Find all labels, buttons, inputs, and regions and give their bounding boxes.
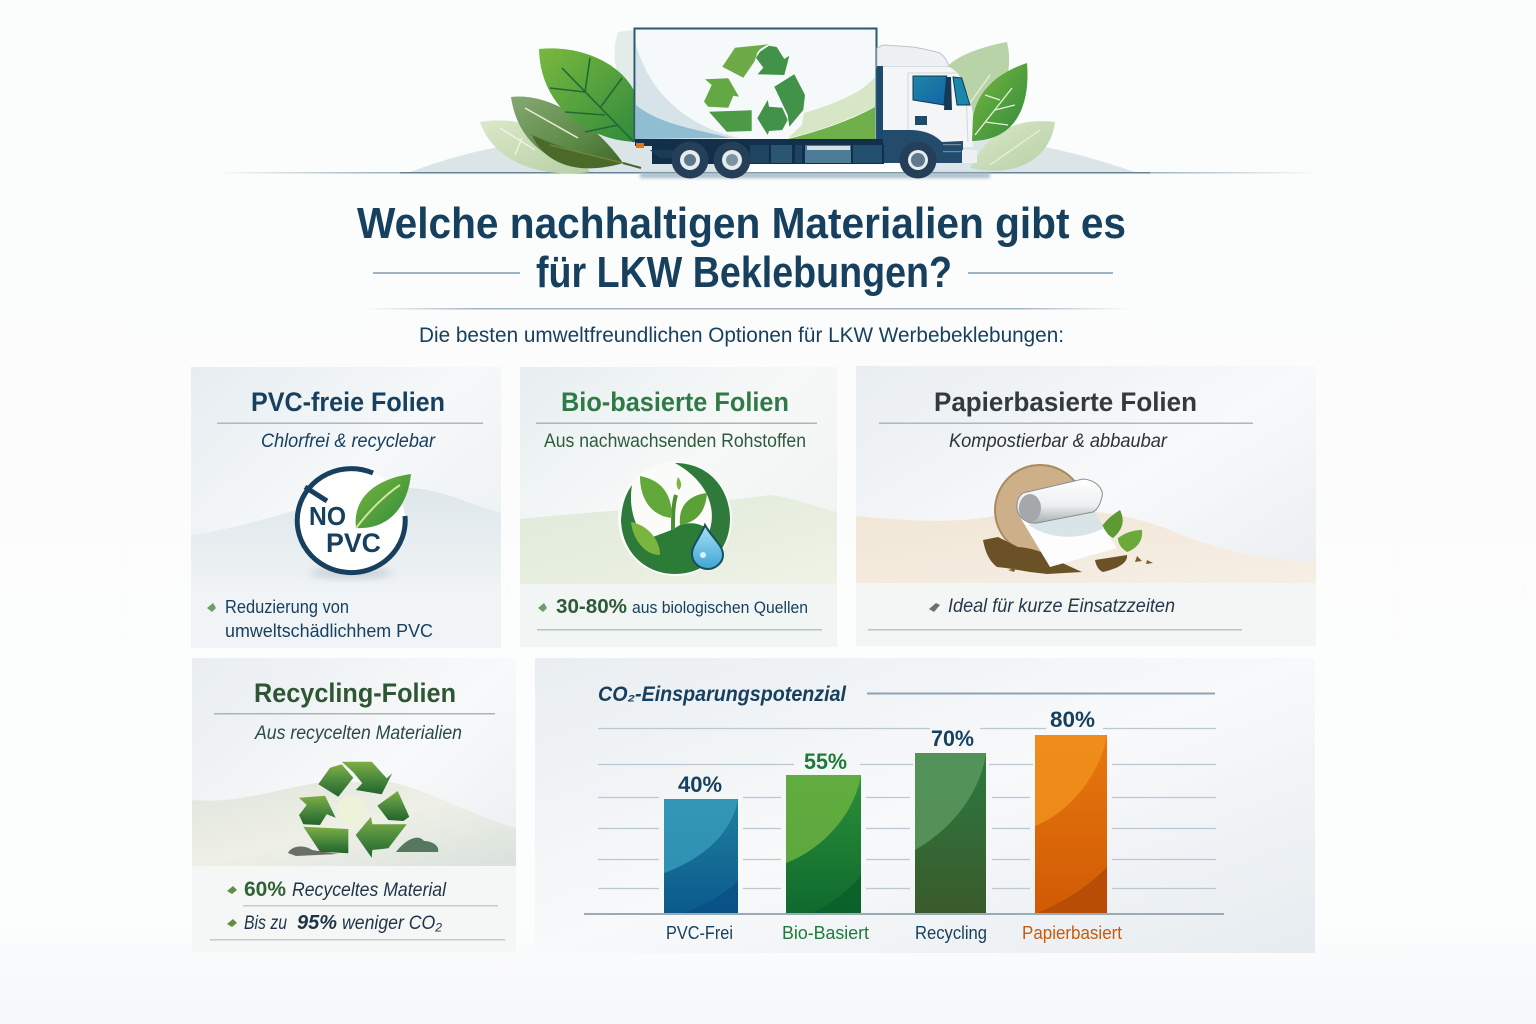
panel: PVC-freie Folien	[191, 367, 501, 648]
subheading: Chlorfrei & recyclebar	[261, 431, 436, 452]
bullet text: aus biologischen Quellen	[632, 598, 808, 617]
icon: no PVC badge: NO	[309, 501, 346, 531]
bullet text	[207, 597, 433, 641]
subheading: Aus nachwachsenden Rohstoffen	[544, 431, 806, 452]
axis labels: Bio-Basiert	[782, 923, 869, 943]
heading: Recycling-Folien	[254, 678, 456, 708]
bullet text: Reduzierung von	[225, 597, 349, 617]
bar: Bio-Basiert 55%	[786, 749, 861, 914]
heading: Papierbasierte Folien	[934, 387, 1197, 417]
axis labels: PVC-Frei	[666, 923, 733, 943]
bar: Papierbasiert 80%	[1035, 707, 1107, 914]
icon: right leaves	[948, 42, 1055, 171]
bar: Recycling 70%: 70%	[931, 726, 974, 751]
truck cargo box	[634, 28, 876, 140]
chart title: CO₂-Einsparungspotenzial	[598, 683, 847, 706]
subheading: Kompostierbar & abbaubar	[949, 431, 1168, 452]
icon: no PVC badge: PVC	[326, 528, 381, 558]
icon: recycling symbol on truck	[704, 44, 805, 135]
heading: PVC-freie Folien	[251, 387, 445, 417]
bullet: recycled material: Recyceltes Material	[292, 880, 447, 901]
bullet: CO2 reduction: Bis zu	[244, 913, 287, 934]
title: für LKW Beklebungen?	[536, 248, 952, 297]
subheading: Aus recycelten Materialien	[254, 723, 462, 744]
panel: Bio-basierte Folien	[520, 367, 837, 647]
truck	[634, 28, 977, 178]
bar: Recycling 70%	[915, 726, 986, 914]
icon: left leaves	[480, 30, 641, 173]
subtitle: Die besten umweltfreundlichen Optionen für LKW Werbebeklebungen:	[419, 324, 1064, 347]
axis labels: Papierbasiert	[1022, 923, 1122, 943]
bullet: CO2 reduction: weniger CO₂	[342, 913, 443, 934]
icon: plant with water drop	[618, 462, 732, 576]
icon: recycling symbol	[288, 762, 438, 858]
axis labels	[666, 923, 1122, 943]
bullet: CO2 reduction: 95%	[297, 912, 337, 934]
truck chassis	[635, 139, 884, 164]
panel: Recycling-Folien	[192, 658, 516, 952]
panel: Papierbasierte Folien	[856, 366, 1316, 646]
bar: Papierbasiert 80%: 80%	[1050, 707, 1095, 732]
bar: PVC-Frei 40%	[664, 772, 738, 914]
bullet: recycled material	[227, 878, 447, 901]
bullet: recycled material: 60%	[244, 878, 286, 901]
bullet text	[538, 596, 808, 618]
truck cab	[877, 45, 977, 163]
panel: CO2 savings chart	[535, 658, 1315, 953]
title	[357, 199, 1126, 297]
icon: compostable paper roll	[983, 465, 1153, 574]
hero illustration: truck with leaves	[215, 28, 1320, 178]
ground hill and line	[215, 136, 1320, 178]
bar: Bio-Basiert 55%: 55%	[804, 749, 847, 774]
title divider lines	[365, 272, 1130, 310]
bullet text: 30-80%	[556, 596, 627, 618]
bullet: CO2 reduction	[227, 912, 443, 934]
icon: no PVC badge	[297, 468, 411, 578]
bar chart	[584, 707, 1224, 915]
truck wheels	[672, 142, 936, 178]
title: Welche nachhaltigen Materialien gibt es	[357, 199, 1126, 248]
bar: PVC-Frei 40%: 40%	[678, 772, 722, 797]
heading: Bio-basierte Folien	[561, 387, 789, 417]
bullet text: umweltschädlichhem PVC	[225, 621, 433, 641]
axis labels: Recycling	[915, 923, 987, 943]
bullet text: Ideal für kurze Einsatzzeiten	[948, 596, 1175, 617]
